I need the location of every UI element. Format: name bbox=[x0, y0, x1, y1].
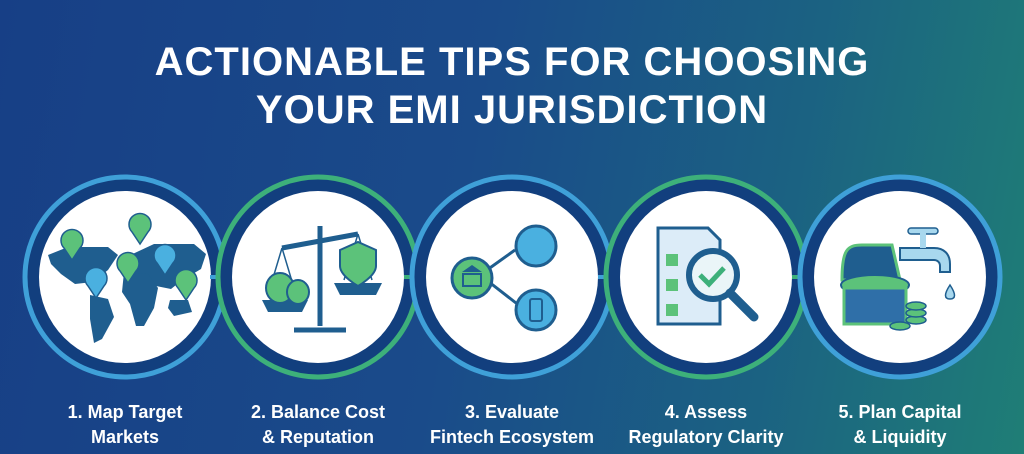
label 1 bbox=[68, 402, 182, 447]
step 4 circle bbox=[606, 177, 806, 377]
arrow 4-5 bbox=[792, 269, 816, 285]
label 3 bbox=[430, 402, 594, 447]
label 2: & Reputation bbox=[262, 427, 374, 447]
arrow 1-2 bbox=[210, 269, 234, 285]
label 4: Regulatory Clarity bbox=[628, 427, 784, 447]
label 5: 5. Plan Capital bbox=[838, 402, 962, 422]
icon: treasure chest and tap bbox=[842, 245, 900, 280]
step 5 circle bbox=[800, 177, 1000, 377]
arrow 2-3 bbox=[404, 269, 428, 285]
label 3: Fintech Ecosystem bbox=[430, 427, 594, 447]
step 1 circle bbox=[25, 177, 225, 377]
icon: balance scale bbox=[270, 226, 372, 330]
step 3 circle bbox=[412, 177, 612, 377]
icon: checklist with magnifier bbox=[658, 228, 720, 324]
label 4: 4. Assess bbox=[665, 402, 747, 422]
label 2: 2. Balance Cost bbox=[251, 402, 385, 422]
label 3: 3. Evaluate bbox=[465, 402, 559, 422]
label 1: 1. Map Target bbox=[68, 402, 182, 422]
icon: fintech network bbox=[480, 250, 525, 310]
title: ACTIONABLE TIPS FOR CHOOSING bbox=[155, 40, 869, 84]
arrow 3-4 bbox=[598, 269, 622, 285]
label 1: Markets bbox=[91, 427, 159, 447]
label 2 bbox=[251, 402, 385, 447]
label 4 bbox=[628, 402, 784, 447]
icon: world map with pins bbox=[48, 244, 206, 343]
title bbox=[155, 40, 869, 132]
title: YOUR EMI JURISDICTION bbox=[256, 88, 768, 132]
label 5: & Liquidity bbox=[854, 427, 946, 447]
step 2 circle bbox=[218, 177, 418, 377]
label 5 bbox=[838, 402, 962, 447]
